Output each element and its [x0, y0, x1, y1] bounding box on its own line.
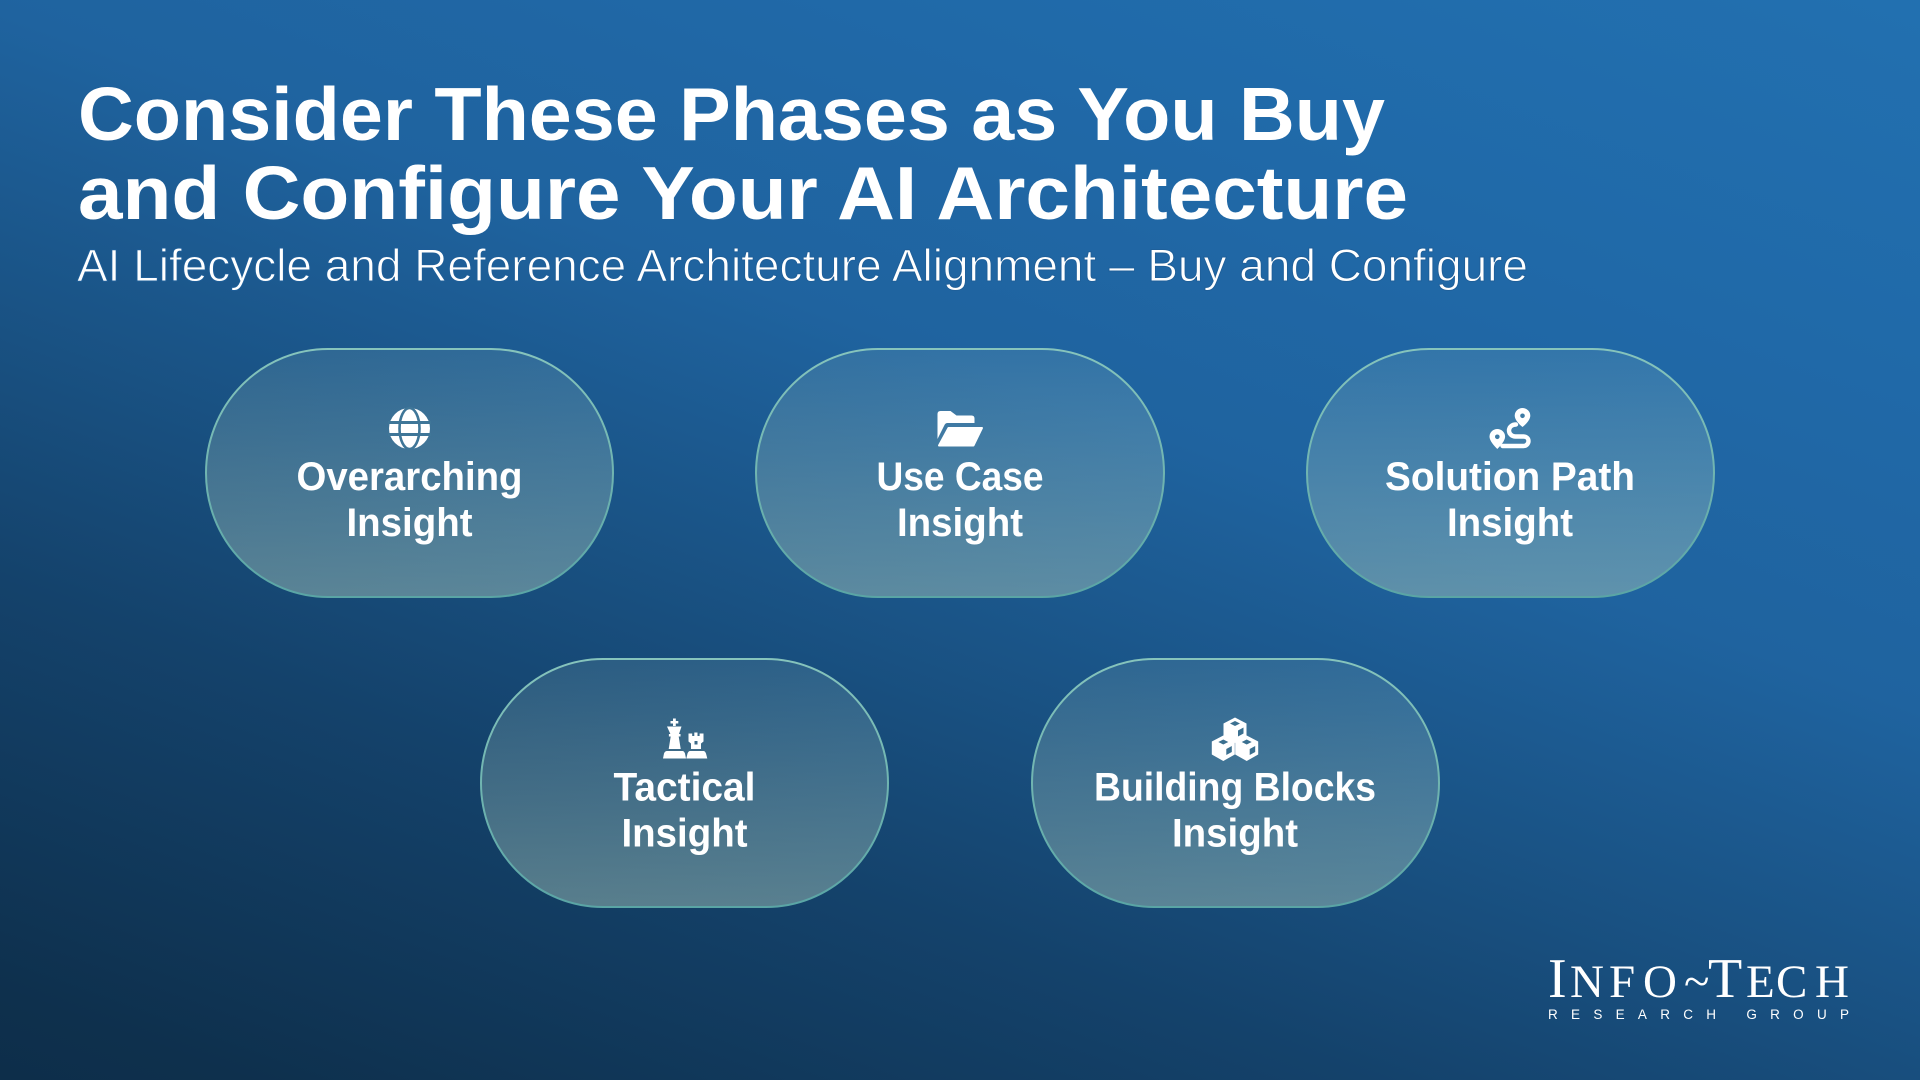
panel: overarching insight — [206, 349, 613, 597]
logo: Info-Tech Research Group — [1548, 948, 1849, 1022]
label: Use Case — [876, 455, 1044, 499]
label — [296, 455, 522, 545]
label: Solution Path — [1385, 455, 1635, 499]
label: Insight — [1172, 812, 1298, 856]
label — [1385, 455, 1635, 545]
label: Building Blocks — [1094, 766, 1376, 810]
label: Overarching — [296, 455, 522, 499]
label — [614, 766, 756, 856]
label: Insight — [346, 501, 472, 545]
title: and Configure Your AI Architecture — [78, 151, 1408, 235]
panel: tactical insight — [481, 659, 888, 907]
panel: solution path insight — [1307, 349, 1714, 597]
title — [78, 72, 1408, 235]
subtitle: AI Lifecycle and Reference Architecture Alignment – Buy and Configure — [77, 240, 1528, 291]
label: Insight — [1447, 501, 1573, 545]
logo: Info-Tech Research Group: I — [1548, 948, 1567, 1010]
label: Tactical — [614, 766, 756, 810]
logo: Info-Tech Research Group: ECH — [1746, 956, 1849, 1008]
panel: use case insight — [756, 349, 1164, 597]
title: Consider These Phases as You Buy — [78, 72, 1385, 156]
label: Insight — [897, 501, 1023, 545]
logo: Info-Tech Research Group: NFO~ — [1570, 956, 1709, 1008]
icon: chess pieces — [663, 718, 707, 758]
logo: Info-Tech Research Group: T — [1708, 948, 1742, 1010]
icon: globe — [388, 408, 431, 449]
label: Insight — [622, 812, 748, 856]
icon: blocks — [1212, 718, 1258, 761]
icon: route with pins — [1490, 408, 1530, 449]
logo: Info-Tech Research Group: RESEARCH GROUP — [1548, 1007, 1849, 1022]
label — [876, 455, 1044, 545]
icon: folder — [938, 411, 982, 446]
panel: building blocks insight — [1032, 659, 1439, 907]
label — [1094, 766, 1376, 856]
